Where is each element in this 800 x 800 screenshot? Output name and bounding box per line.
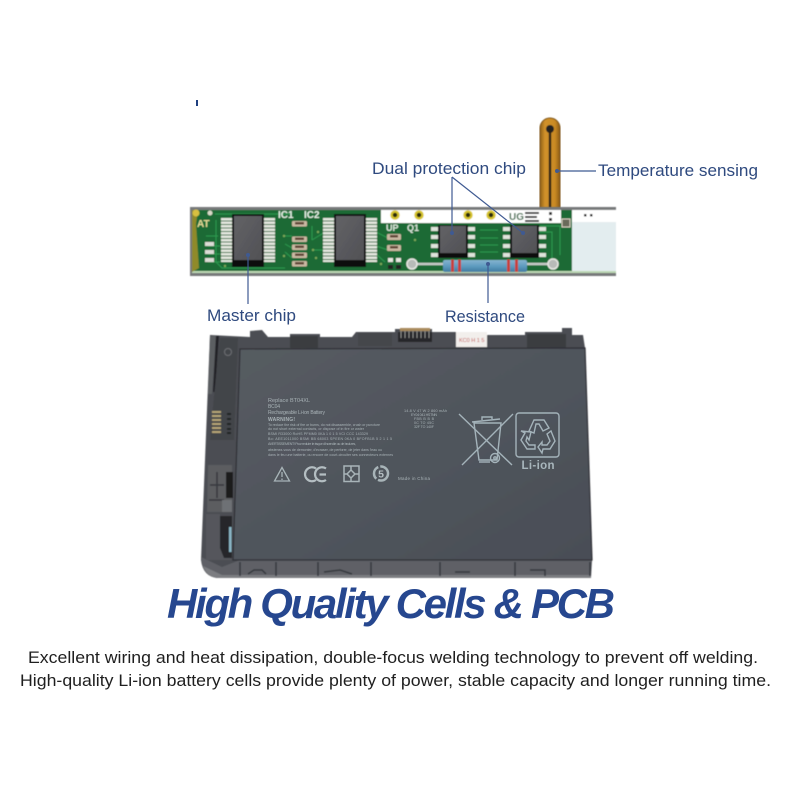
- Li-ion label: Li-ion: [522, 460, 554, 472]
- battery label small print: Bo: AEE1011000 BSMI BB 68003 SPEEN 0KA 0 BFOFB1B 5 2 1 1 5: [268, 437, 392, 441]
- battery label small print: WARNING!: [268, 417, 295, 423]
- gold through-holes: [392, 212, 494, 218]
- white top strip: [381, 210, 561, 223]
- icon: CE mark: [305, 467, 326, 481]
- connector strip: [398, 332, 432, 342]
- battery label small print: BC04: [268, 404, 280, 410]
- solder pads left: [205, 242, 214, 262]
- silkscreen IC1 IC2: IC1: [278, 210, 294, 221]
- side contacts: [212, 411, 221, 433]
- circuit board: [190, 207, 616, 276]
- bottom notches: [240, 562, 590, 576]
- label: temperature sensing: Temperature sensing: [598, 162, 758, 180]
- icon: recycling symbol: [516, 413, 559, 457]
- board lower edge: [192, 271, 616, 273]
- callout lines and anchors: [248, 171, 596, 304]
- battery label small print: 32F TO 140F: [414, 425, 435, 429]
- callout anchor dots: [246, 169, 559, 266]
- battery label small print: To reduce the risk of fire or burns, do not disassemble, crush or puncture: [268, 423, 380, 427]
- battery body: [201, 328, 592, 578]
- battery label small print: Replace BT04XL: [268, 398, 310, 404]
- battery label small print: BSMI R33000 RoHS PFMM0 0KA 1 0 1 5 VCI CCC 143329: [268, 432, 368, 436]
- battery label small print: [268, 398, 447, 481]
- battery label panel: [233, 348, 592, 560]
- white end section: [572, 210, 616, 271]
- laptop battery: [201, 328, 592, 578]
- battery label small print: do not short external contacts, or dispose of in fire or water: [268, 427, 365, 431]
- silkscreen AT: AT: [197, 219, 210, 230]
- latch grid: [207, 465, 232, 512]
- laptop battery: KC0 H 1 5: [459, 338, 484, 344]
- left side mechanism: [208, 336, 216, 394]
- circuit board: IC2: [304, 210, 320, 221]
- master chip: [221, 214, 275, 267]
- board base: [190, 207, 616, 276]
- traces: [206, 214, 560, 268]
- description text: [20, 649, 771, 690]
- protection chip left: [431, 225, 475, 258]
- PCB vias: [224, 231, 416, 267]
- silkscreen UG: UG: [509, 212, 524, 223]
- battery label small print: 0C TO 45C: [414, 421, 434, 425]
- lower slot: [206, 514, 232, 560]
- battery label small print: Rechargeable Li-ion Battery: [268, 410, 326, 416]
- gold contact edge: [192, 210, 199, 272]
- small dark mark: [196, 100, 198, 106]
- icon: 5 year circle: 5: [378, 468, 384, 480]
- contact dots: [227, 413, 231, 434]
- icon: China RoHS square: [344, 466, 359, 482]
- battery label small print: abstenez-vous de demonter, d'ecraser, de perforer, de jeter dans l'eau ou: [268, 448, 382, 452]
- bottom rim: [201, 557, 591, 578]
- icon: temperature sensor flex strip: [540, 118, 560, 208]
- title: High Quality Cells & PCB: [167, 580, 615, 628]
- battery label small print: EY04 041 HSTNN: [411, 413, 437, 417]
- small components: [292, 219, 570, 269]
- circuit board: Q1: [407, 223, 419, 233]
- resistor: [407, 259, 558, 272]
- battery label small print: 14.8 V 47 W 2 860 mAh: [404, 409, 447, 413]
- label: dual protection chip: Dual protection chip: [372, 160, 526, 178]
- protection chip right: [503, 225, 546, 258]
- label: resistance: Resistance: [445, 308, 525, 326]
- battery label small print: dans le feu une batterie, ou encore de court-circuiter ses connecteurs externes: [268, 453, 393, 457]
- description text: Excellent wiring and heat dissipation, double-focus welding technology to prevent off welding.: [28, 649, 758, 667]
- top latches: [290, 334, 566, 348]
- battery label small print: Made in China: [398, 476, 430, 481]
- silkscreen UP Q1: UP: [386, 223, 399, 233]
- white sticker: [456, 332, 487, 347]
- icon: 5 year circle: [374, 466, 388, 480]
- icon: crossed-out bin: [459, 414, 513, 465]
- label: master chip: Master chip: [207, 307, 296, 325]
- battery label small print: FBB B B B: [414, 417, 435, 421]
- icon: warning triangle: [274, 468, 290, 481]
- second IC: [323, 214, 377, 267]
- description text: High-quality Li-ion battery cells provide plenty of power, stable capacity and longer running time.: [20, 672, 771, 690]
- connector dots: [525, 212, 552, 222]
- battery label small print: AVERTISSEMENT! Pour reduire le risque d'incendie ou de brulures,: [268, 442, 356, 446]
